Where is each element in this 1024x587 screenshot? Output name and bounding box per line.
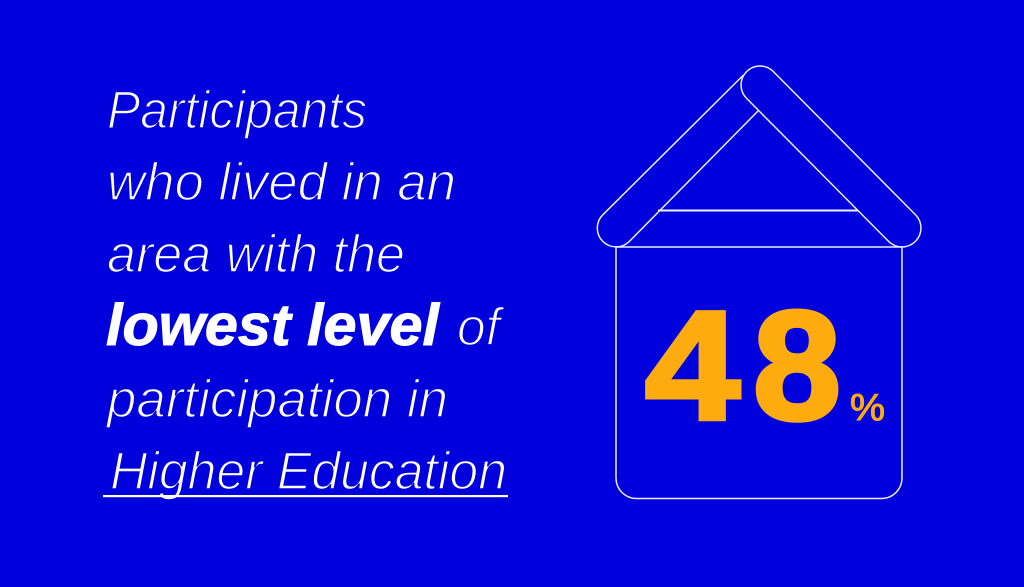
- right roof beam: [741, 66, 921, 247]
- line: area with the: area with the: [107, 225, 405, 284]
- percent sign: %: [850, 387, 885, 429]
- line: Participants: Participants: [107, 81, 367, 140]
- left roof beam: [597, 75, 758, 247]
- text block: statement: [103, 81, 508, 501]
- underline: [103, 495, 508, 497]
- roof crossbar: [658, 210, 858, 212]
- line: Higher Education: Higher Education: [110, 442, 507, 501]
- line: of: of: [457, 298, 505, 357]
- digit 8: 8: [753, 279, 841, 452]
- statistic: 48%: [645, 279, 885, 452]
- icon: house: [597, 66, 921, 499]
- line: who lived in an: who lived in an: [107, 153, 456, 212]
- digit 4: 4: [645, 279, 740, 452]
- line: lowest level (bold emphasis): lowest level: [106, 293, 441, 358]
- house body: [616, 247, 902, 498]
- line: participation in: participation in: [105, 370, 448, 429]
